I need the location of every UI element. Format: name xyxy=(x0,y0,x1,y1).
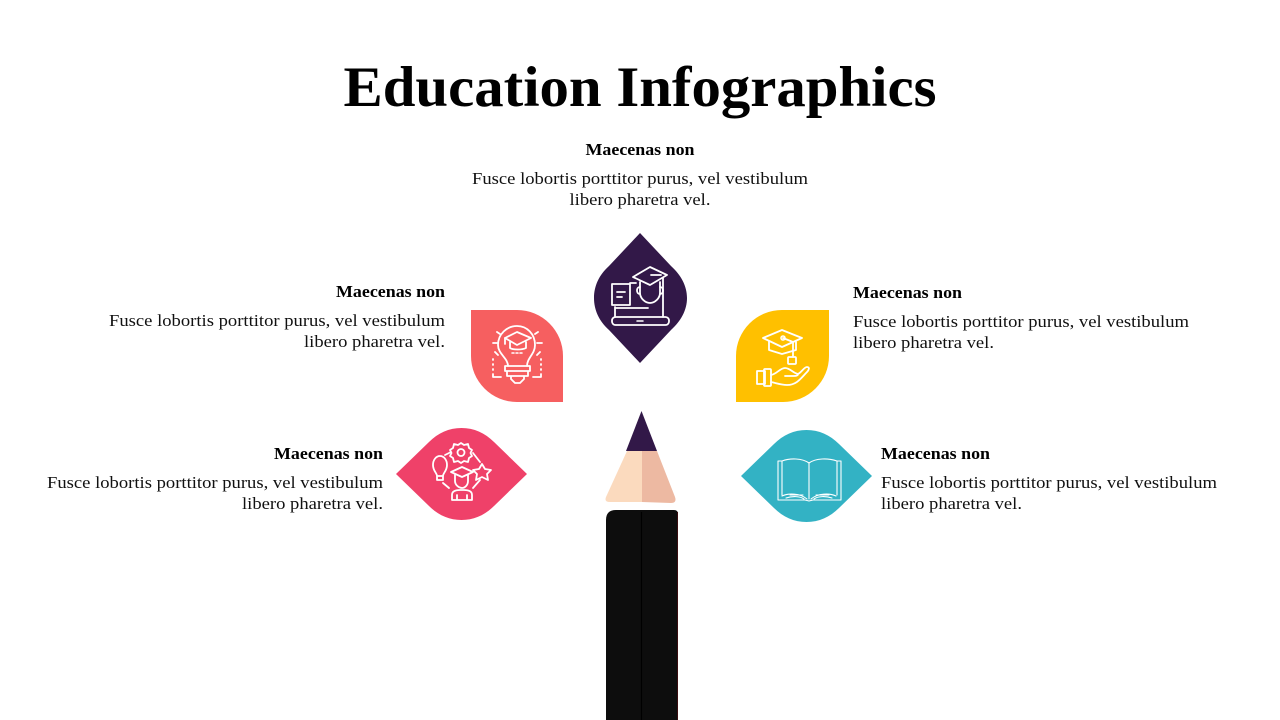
text block: upper right: Maecenas non xyxy=(853,283,963,302)
text block: top: libero pharetra vel. xyxy=(570,190,710,209)
text block: lower left: Fusce lobortis porttitor purus, vel vestibulum xyxy=(47,473,383,492)
text block: upper left xyxy=(109,282,446,351)
text block: lower right xyxy=(881,444,1217,513)
text block: upper right xyxy=(853,283,1189,352)
petal: yellow upper right with hand and cap icon xyxy=(736,310,829,402)
text block: upper left: Maecenas non xyxy=(336,282,446,301)
text block: lower left xyxy=(47,444,384,513)
petal: pink lower left with student skills icon xyxy=(396,428,527,520)
text block: lower right: libero pharetra vel. xyxy=(881,494,1022,513)
title: Education Infographics xyxy=(344,56,936,119)
text block: top: Fusce lobortis porttitor purus, vel vestibulum xyxy=(472,169,808,188)
text block: upper left: libero pharetra vel. xyxy=(304,332,445,351)
text block: lower right: Maecenas non xyxy=(881,444,991,463)
pencil xyxy=(606,411,678,720)
petal: purple top with laptop graduate icon xyxy=(594,233,687,363)
pencil wood left xyxy=(606,451,642,502)
text block: lower left: Maecenas non xyxy=(274,444,384,463)
text block: upper right: Fusce lobortis porttitor purus, vel vestibulum xyxy=(853,312,1189,331)
text block: top: Maecenas non xyxy=(586,140,695,159)
text block: top xyxy=(472,140,808,209)
text block: lower left: libero pharetra vel. xyxy=(242,494,383,513)
petal: teal lower right with open book icon xyxy=(741,430,872,522)
text block: upper right: libero pharetra vel. xyxy=(853,333,994,352)
pencil lead tip xyxy=(626,411,657,451)
text block: lower right: Fusce lobortis porttitor purus, vel vestibulum xyxy=(881,473,1217,492)
pencil wood right xyxy=(642,451,676,503)
pencil body xyxy=(606,510,678,720)
text block: upper left: Fusce lobortis porttitor purus, vel vestibulum xyxy=(109,311,445,330)
petal: coral upper left with light bulb icon xyxy=(471,310,563,402)
